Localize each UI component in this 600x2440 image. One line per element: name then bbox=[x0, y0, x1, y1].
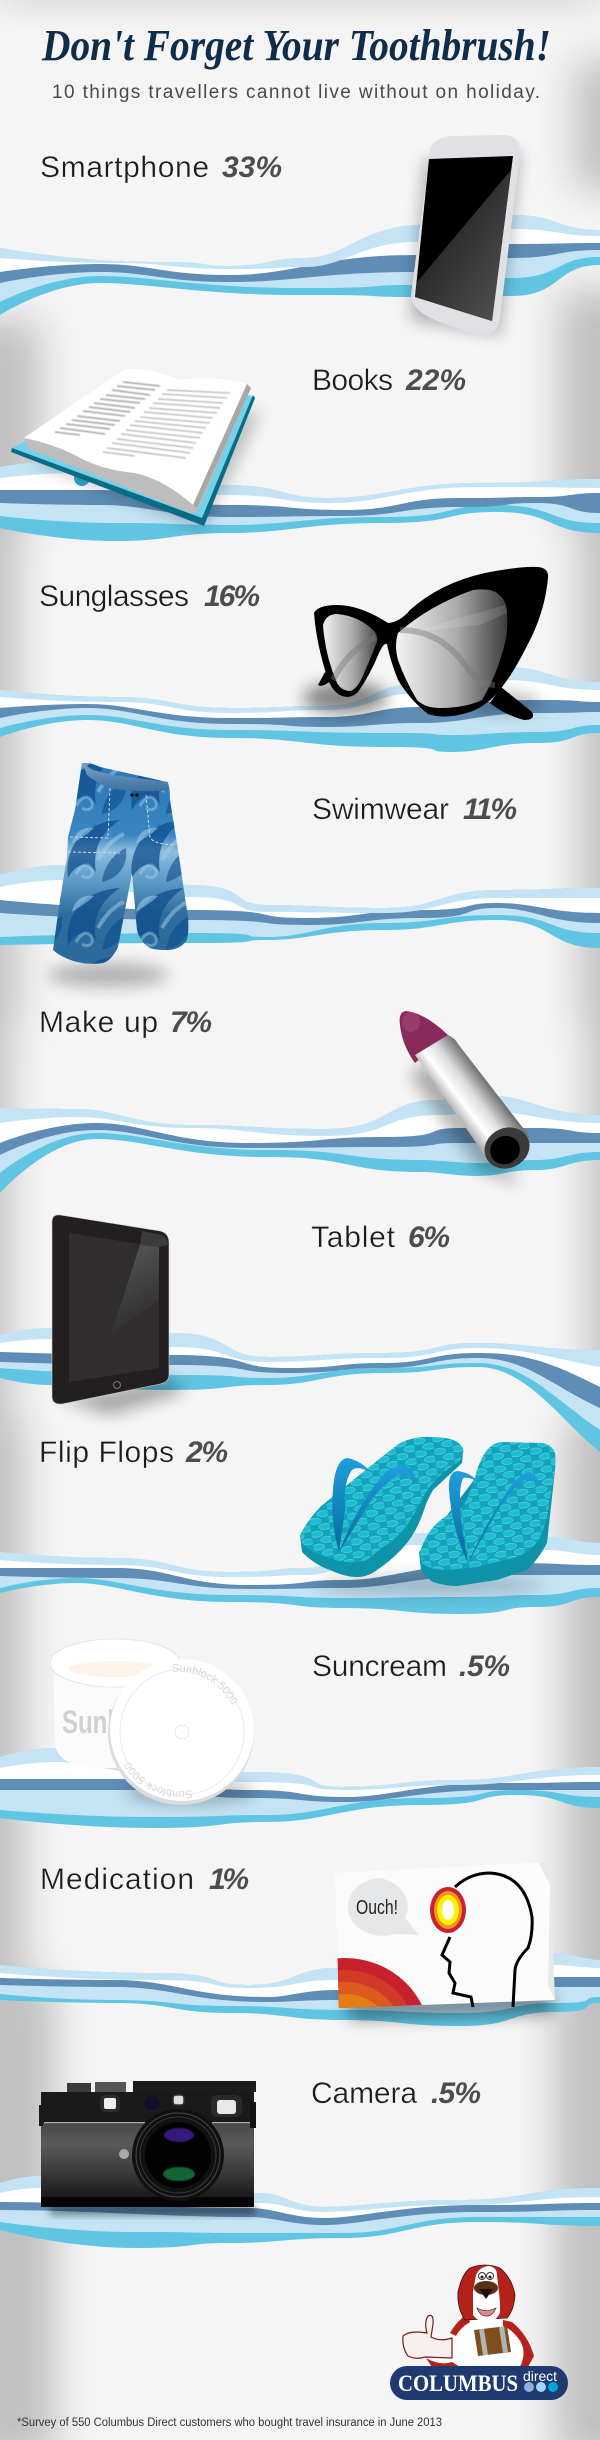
icon: lipstick bbox=[400, 1011, 536, 1185]
wave 1 bbox=[0, 215, 600, 315]
icon: open book bbox=[11, 369, 262, 530]
wave 9 bbox=[0, 1953, 600, 2026]
wave 3 bbox=[0, 667, 600, 752]
icon: flip flops bbox=[300, 1437, 556, 1594]
icon: headache card: Ouch! bbox=[356, 1897, 398, 1919]
label: sunglasses: Sunglasses bbox=[39, 580, 189, 613]
label: swimwear bbox=[312, 793, 517, 826]
wave 5 bbox=[0, 1096, 600, 1193]
columbus badge bbox=[390, 2366, 568, 2400]
icon: smartphone bbox=[410, 135, 520, 335]
label: suncream bbox=[312, 1650, 510, 1683]
subtitle: 10 things travellers cannot live without on holiday. bbox=[52, 82, 540, 103]
label: smartphone bbox=[40, 151, 282, 184]
label: camera bbox=[311, 2077, 481, 2110]
logo: columbus direct mascot and badge bbox=[390, 2265, 568, 2400]
label: smartphone: Smartphone bbox=[40, 151, 209, 184]
label: smartphone: 33% bbox=[222, 151, 282, 184]
label: swimwear: 11% bbox=[463, 793, 517, 826]
label: sunglasses bbox=[39, 580, 260, 613]
icon: swim shorts bbox=[48, 763, 188, 987]
footnote: *Survey of 550 Columbus Direct customers who bought travel insurance in June 2013 bbox=[17, 2417, 442, 2429]
wave 7 bbox=[0, 1533, 600, 1614]
wave 8 bbox=[0, 1748, 600, 1828]
columbus badge: direct bbox=[523, 2368, 557, 2384]
wave 10 bbox=[0, 2176, 600, 2248]
wave 4 bbox=[0, 865, 600, 948]
icon: suncream jar: Sunblock 5000 bbox=[172, 1664, 238, 1704]
wave 2 bbox=[0, 460, 600, 541]
label: make up: Make up bbox=[39, 1006, 158, 1039]
mascot dog bbox=[403, 2265, 534, 2367]
label: medication: Medication bbox=[40, 1863, 194, 1896]
label: make up: 7% bbox=[170, 1006, 212, 1039]
columbus badge: COLUMBUS bbox=[398, 2371, 518, 2396]
title: Don't Forget Your Toothbrush! bbox=[41, 21, 551, 70]
icon: suncream jar: Sunblock 5000 bbox=[124, 1762, 192, 1798]
wave 6 bbox=[0, 1328, 600, 1452]
label: books: 22% bbox=[405, 364, 466, 397]
label: flip flops: 2% bbox=[185, 1436, 228, 1469]
icon: tablet bbox=[52, 1215, 185, 1415]
label: suncream: Suncream bbox=[312, 1650, 447, 1683]
label: flip flops: Flip Flops bbox=[39, 1436, 174, 1469]
label: tablet bbox=[311, 1221, 450, 1254]
icon: camera bbox=[39, 2081, 256, 2215]
label: swimwear: Swimwear bbox=[312, 793, 449, 826]
icon: headache card bbox=[338, 1862, 562, 2030]
label: books: Books bbox=[312, 364, 393, 397]
label: books bbox=[312, 364, 466, 397]
icon: suncream jar bbox=[50, 1638, 258, 1812]
label: sunglasses: 16% bbox=[204, 580, 260, 613]
label: tablet: Tablet bbox=[311, 1221, 396, 1254]
icon: suncream jar: Sunb bbox=[62, 1704, 122, 1740]
label: camera: .5% bbox=[431, 2077, 481, 2110]
label: suncream: .5% bbox=[459, 1650, 510, 1683]
label: medication: 1% bbox=[209, 1863, 249, 1896]
label: camera: Camera bbox=[311, 2077, 417, 2110]
label: make up bbox=[39, 1006, 212, 1039]
label: tablet: 6% bbox=[408, 1221, 450, 1254]
icon: sunglasses bbox=[303, 567, 548, 720]
